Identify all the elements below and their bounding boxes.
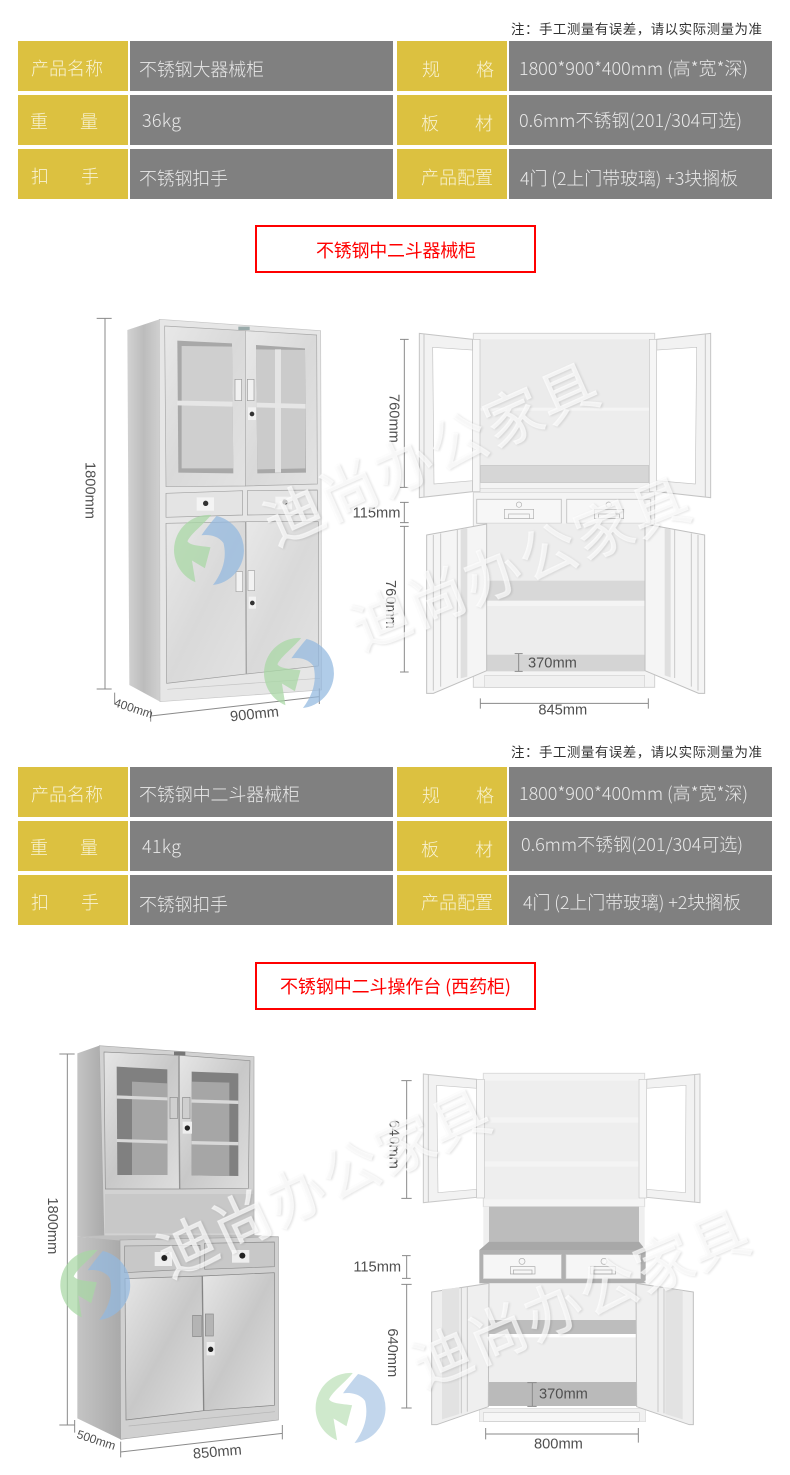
open cabinet diagram 2 with dimensions: 800mm — [534, 1437, 583, 1453]
spec table 1: 不锈钢扣手 — [139, 165, 228, 191]
open cabinet diagram 1 with dimensions: 370mm — [528, 655, 577, 671]
spec table 2: 产品名称 — [31, 781, 103, 807]
open cabinet diagram 1 with dimensions: 845mm — [538, 702, 587, 718]
logo watermark 2 — [264, 638, 334, 708]
title box 2: 不锈钢中二斗操作台 (西药柜) — [280, 973, 511, 999]
spec table 1: 手 — [81, 163, 99, 189]
spec table 1: 格 — [476, 56, 494, 82]
title box 2 — [256, 963, 535, 1009]
cabinet photo 1 with dimensions — [81, 318, 322, 725]
spec table 2: 0.6mm不锈钢(201/304可选) — [521, 831, 743, 857]
watermark text 2: 迪尚办公家具 — [337, 453, 702, 666]
open cabinet diagram 2 with dimensions: 370mm — [539, 1386, 588, 1402]
spec table 1: 产品名称 — [31, 55, 103, 81]
spec table 1: 量 — [80, 108, 98, 134]
spec table 2: 扣 — [31, 889, 49, 915]
spec table 2: 1800*900*400mm (高*宽*深) — [519, 780, 748, 806]
spec table 1: 规 — [422, 56, 440, 82]
cabinet photo 1 with dimensions: 400mm — [112, 696, 155, 721]
logo watermark 4 — [316, 1373, 386, 1443]
watermark text 4: 迪尚办公家具 — [398, 1186, 762, 1404]
spec table 2: 板 — [421, 836, 439, 862]
spec table 1: 36kg — [142, 107, 181, 133]
cabinet photo 2 with dimensions — [44, 1046, 282, 1463]
open cabinet diagram 1 with dimensions: 760mm — [382, 580, 398, 629]
spec table 2: 41kg — [142, 833, 181, 859]
spec table 1: 产品配置 — [421, 164, 493, 190]
spec table 2: 产品配置 — [421, 889, 493, 915]
spec table 1 — [18, 41, 772, 199]
spec table 1: 不锈钢大器械柜 — [139, 56, 264, 82]
open cabinet diagram 1 with dimensions — [353, 333, 711, 718]
spec table 2: 重 — [30, 834, 48, 860]
spec table 1: 4门 (2上门带玻璃) +3块搁板 — [520, 165, 738, 191]
spec table 2: 手 — [81, 889, 99, 915]
note: measurement disclaimer 2: 注：手工测量有误差，请以实际测量为准 — [511, 741, 762, 761]
title box 1: 不锈钢中二斗器械柜 — [316, 237, 476, 263]
logo watermark 1 — [174, 515, 244, 585]
spec table 1: 材 — [475, 110, 493, 136]
watermark text 3: 迪尚办公家具 — [142, 1065, 503, 1293]
spec table 1: 重 — [30, 108, 48, 134]
spec table 2 — [18, 767, 772, 925]
open cabinet diagram 2 with dimensions: 640mm — [384, 1328, 400, 1377]
spec table 2: 4门 (2上门带玻璃) +2块搁板 — [523, 889, 741, 915]
cabinet photo 2 with dimensions: 850mm — [192, 1442, 242, 1463]
cabinet photo 1 with dimensions: 1800mm — [81, 462, 97, 519]
spec table 1: 板 — [421, 110, 439, 136]
cabinet photo 2 with dimensions: 1800mm — [44, 1197, 60, 1254]
open cabinet diagram 1 with dimensions: 115mm — [353, 505, 400, 521]
spec table 2: 规 — [422, 782, 440, 808]
spec table 1: 1800*900*400mm (高*宽*深) — [519, 55, 748, 81]
open cabinet diagram 2 with dimensions: 115mm — [353, 1260, 401, 1276]
spec table 2: 不锈钢中二斗器械柜 — [139, 781, 300, 807]
watermark text 1: 迪尚办公家具 — [249, 338, 612, 562]
logo watermark 3 — [60, 1250, 130, 1320]
title box 1 — [256, 226, 535, 272]
open cabinet diagram 2 with dimensions — [353, 1073, 700, 1453]
open cabinet diagram 1 with dimensions: 760mm — [385, 394, 401, 443]
spec table 2: 格 — [476, 782, 494, 808]
spec table 2: 材 — [475, 836, 493, 862]
cabinet photo 1 with dimensions: 900mm — [229, 704, 280, 725]
spec table 2: 量 — [80, 834, 98, 860]
spec table 1: 扣 — [31, 163, 49, 189]
spec table 1: 0.6mm不锈钢(201/304可选) — [519, 107, 742, 133]
note: measurement disclaimer 1: 注：手工测量有误差，请以实际测量为准 — [511, 18, 762, 38]
spec table 2: 不锈钢扣手 — [139, 891, 228, 917]
open cabinet diagram 2 with dimensions: 640mm — [385, 1120, 401, 1169]
cabinet photo 2 with dimensions: 500mm — [75, 1427, 117, 1453]
